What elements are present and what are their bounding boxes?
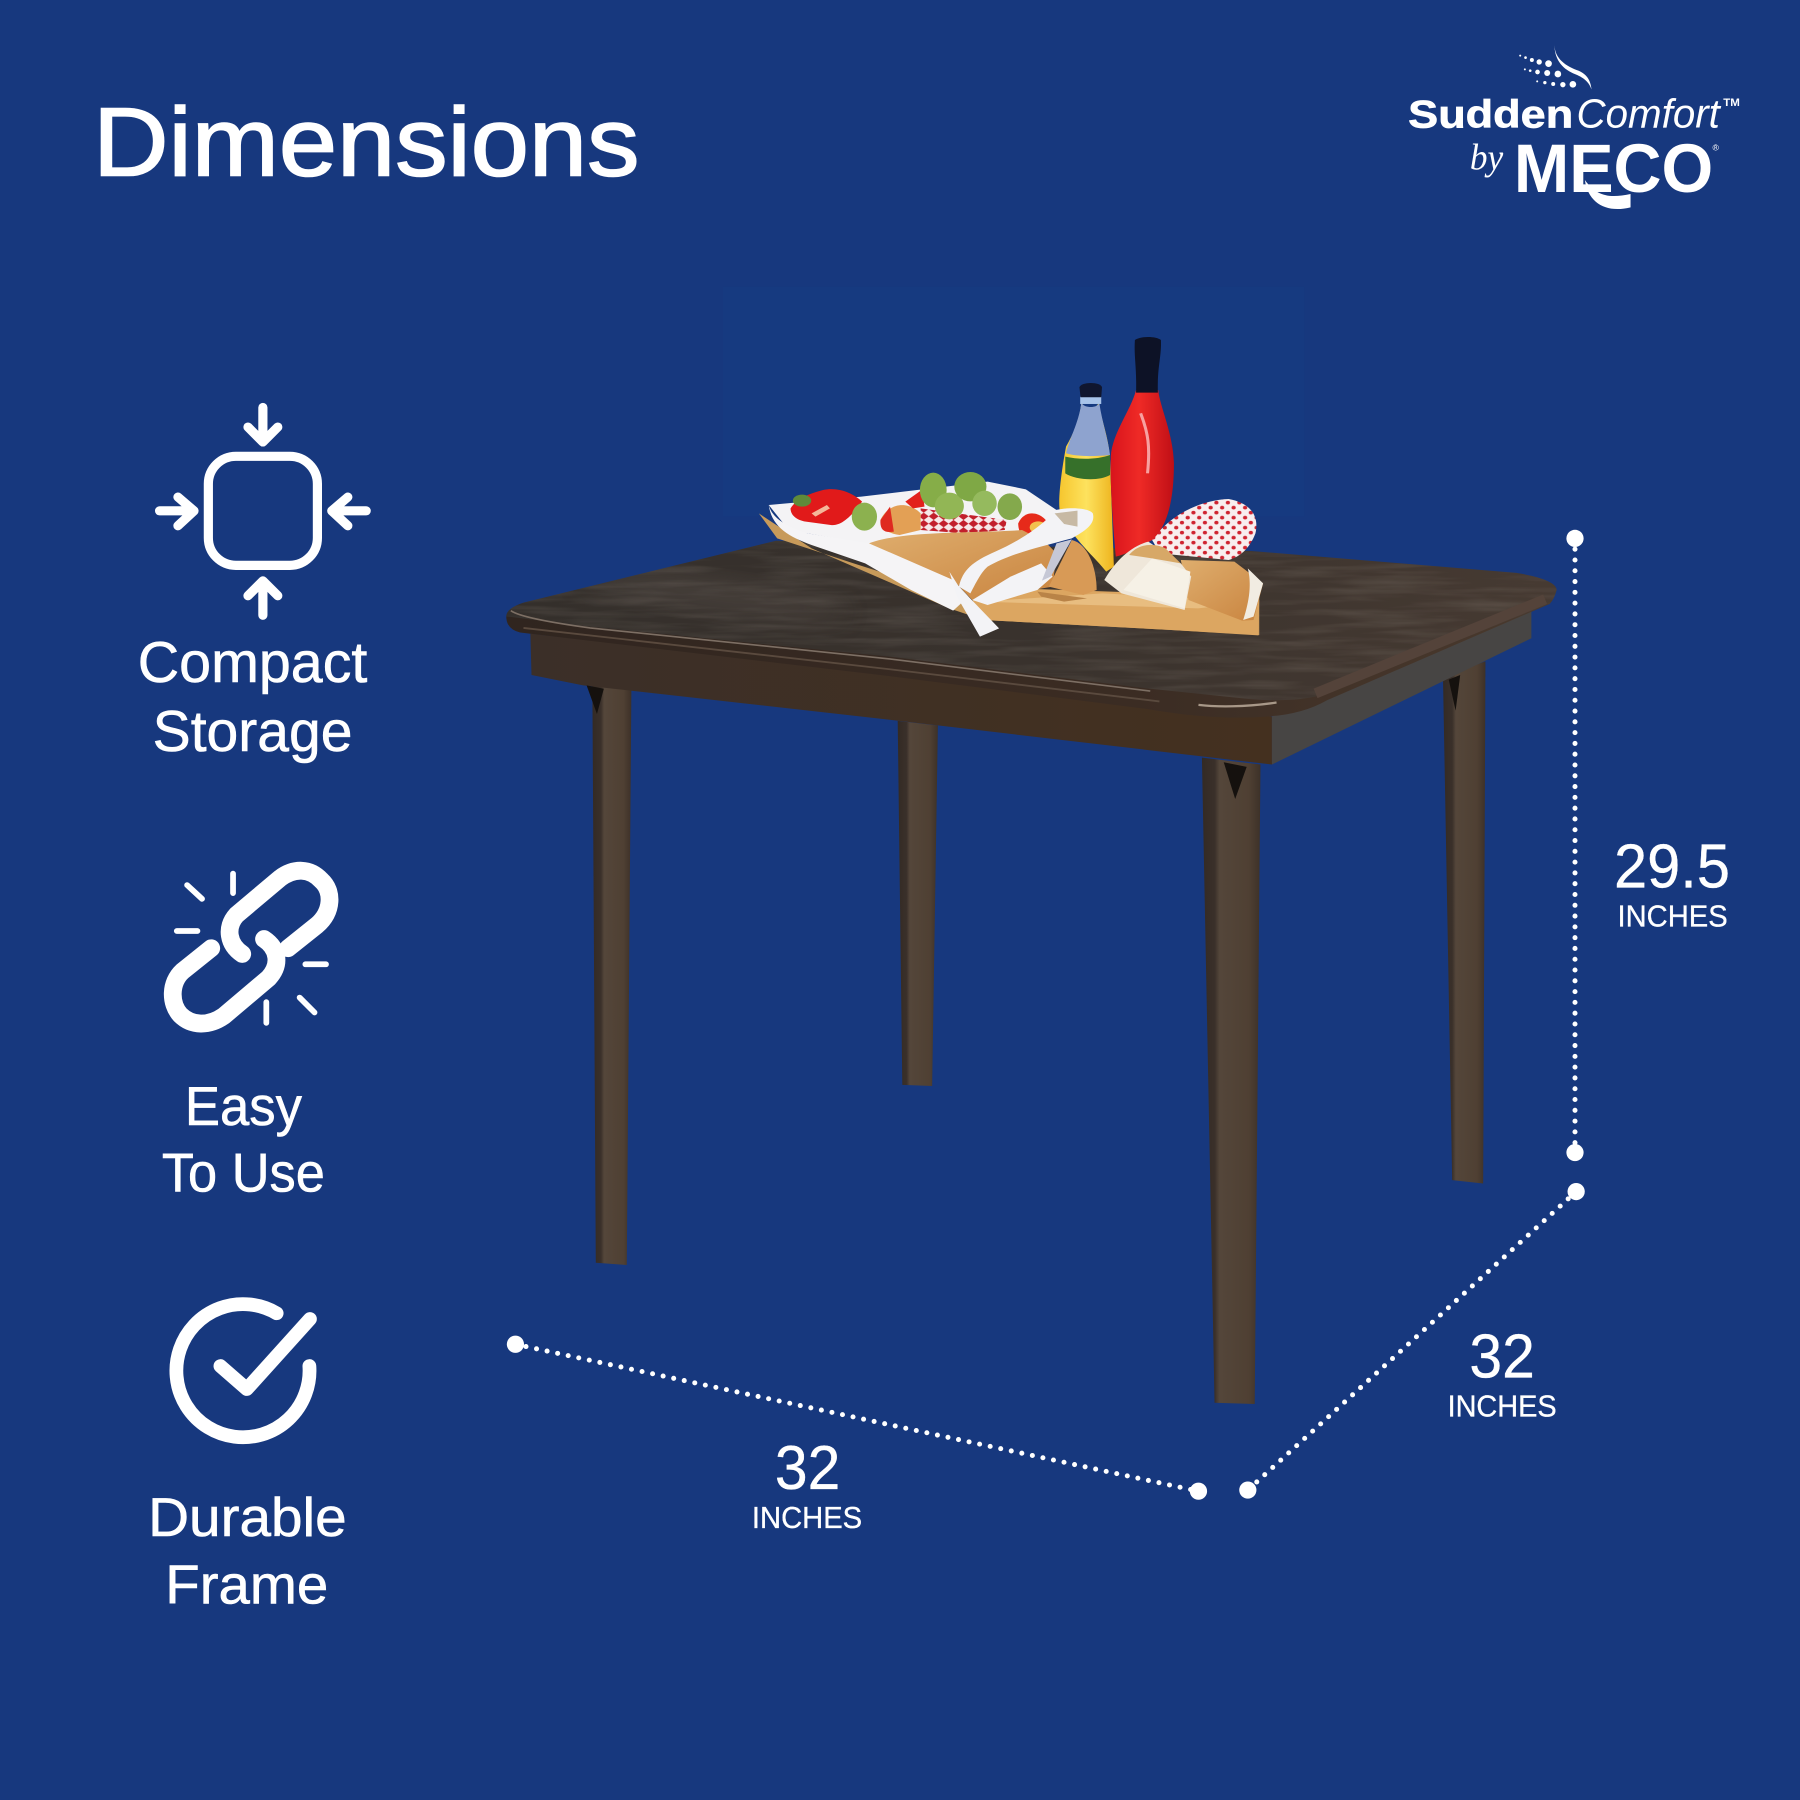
feature: easy to use (162, 871, 330, 1204)
logo: SuddenComfort by MECO: MECO (1514, 131, 1713, 207)
dimension: height 29.5 inches (1566, 530, 1730, 1161)
peppers and vegetables (791, 472, 1050, 540)
label: 29.5 inches: INCHES (1617, 898, 1728, 933)
dimension: width 32 inches (507, 1336, 1207, 1535)
label: 29.5 inches: 29.5 (1614, 832, 1730, 901)
label: compact storage: Compact (138, 631, 367, 695)
food tray on table (759, 337, 1263, 637)
logo: SuddenComfort by MECO: Sudden (1408, 94, 1573, 137)
feature: durable frame (148, 1304, 347, 1616)
label: depth 32 inches: 32 (1469, 1323, 1535, 1392)
back of white cloth (769, 482, 1056, 545)
title: Dimensions (93, 88, 639, 197)
label: 29.5 inches (1614, 832, 1730, 933)
leg hinges (587, 675, 1460, 799)
logo: SuddenComfort by MECO: TM (1723, 97, 1740, 109)
table top and apron (506, 541, 1557, 765)
feature: compact storage (138, 408, 367, 764)
yellow juice bottle (1059, 383, 1114, 572)
dotted line: depth (1239, 1183, 1585, 1499)
dotted line: width (507, 1336, 1207, 1500)
red bottle (1111, 337, 1174, 557)
dotted line: height (1566, 530, 1584, 1161)
front band of cloth (769, 505, 968, 611)
red dotted napkin (1152, 499, 1256, 560)
label: depth 32 inches (1448, 1323, 1557, 1424)
icon: check circle (176, 1304, 310, 1437)
icon: compact arrows (160, 408, 366, 615)
cloth ribbon (949, 508, 1093, 637)
icon: chain link (173, 871, 330, 1024)
label: durable frame: Frame (165, 1554, 328, 1616)
table legs (592, 661, 1485, 1404)
label: width 32 inches: 32 (775, 1434, 840, 1503)
label: durable frame (148, 1486, 347, 1616)
bread loaves (869, 530, 1263, 621)
dimension: depth 32 inches (1239, 1183, 1585, 1499)
logo: SuddenComfort by MECO: ® (1713, 143, 1720, 153)
logo: SuddenComfort by MECO (1408, 43, 1740, 209)
label: easy to use: Easy (185, 1075, 302, 1137)
label: easy to use: To Use (162, 1142, 325, 1204)
label: easy to use (162, 1075, 325, 1204)
label: width 32 inches (752, 1434, 862, 1535)
folding table (506, 541, 1557, 1404)
wooden board (759, 513, 1259, 635)
label: width 32 inches: INCHES (752, 1500, 862, 1535)
logo: SuddenComfort by MECO: Comfort (1577, 91, 1722, 137)
label: compact storage: Storage (153, 700, 352, 764)
logo: SuddenComfort by MECO: by (1470, 137, 1504, 178)
label: depth 32 inches: INCHES (1448, 1389, 1557, 1424)
label: compact storage (138, 631, 367, 764)
label: durable frame: Durable (148, 1486, 347, 1548)
